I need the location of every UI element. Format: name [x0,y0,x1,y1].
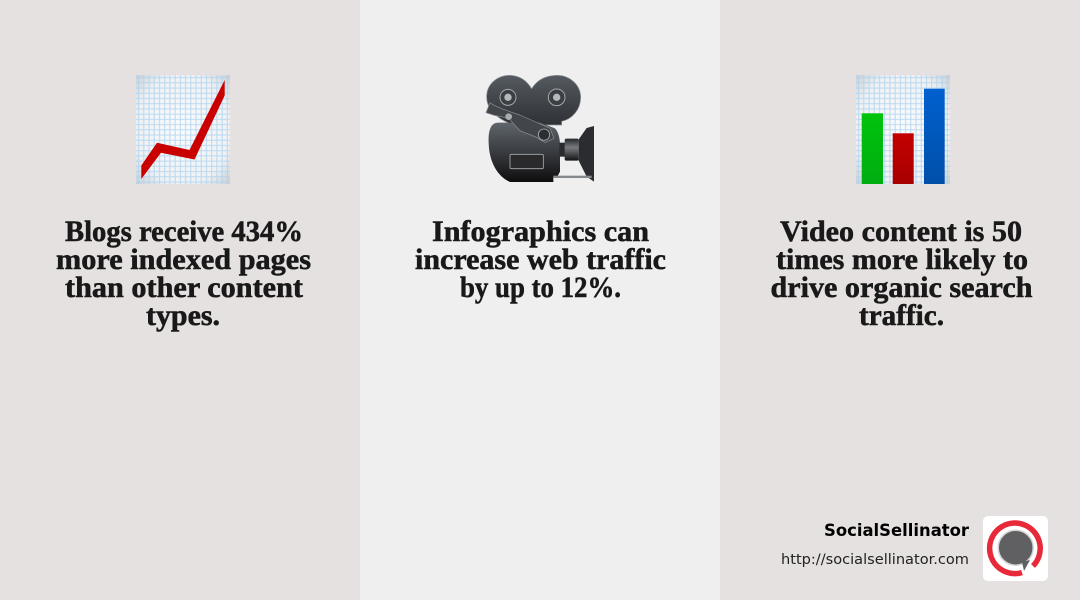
icon: brand logo [983,516,1048,581]
heading: infographics statistic: increase web traffic [415,243,666,276]
heading: blogs statistic: than other content [65,271,303,304]
website url: http://socialsellinator.com [781,552,969,568]
icon: movie camera [486,75,594,182]
heading: blogs statistic: more indexed pages [56,243,311,276]
heading: video statistic [770,215,1033,332]
icon: line chart [136,75,230,184]
heading: blogs statistic: Blogs receive 434% [65,215,303,248]
heading: blogs statistic: types. [146,299,220,332]
panel: blogs [0,0,360,600]
heading: video statistic: traffic. [859,299,944,332]
brand name: SocialSellinator [824,521,970,540]
heading: video statistic: drive organic search [770,271,1033,304]
heading: blogs statistic [56,215,311,332]
heading: infographics statistic: Infographics can [432,215,649,248]
panel: video [720,0,1080,600]
heading: infographics statistic [415,215,666,304]
panel: infographics [360,0,720,600]
heading: video statistic: Video content is 50 [780,215,1022,248]
icon: bar chart [856,75,950,184]
heading: video statistic: times more likely to [776,243,1028,276]
heading: infographics statistic: by up to 12%. [460,271,621,304]
